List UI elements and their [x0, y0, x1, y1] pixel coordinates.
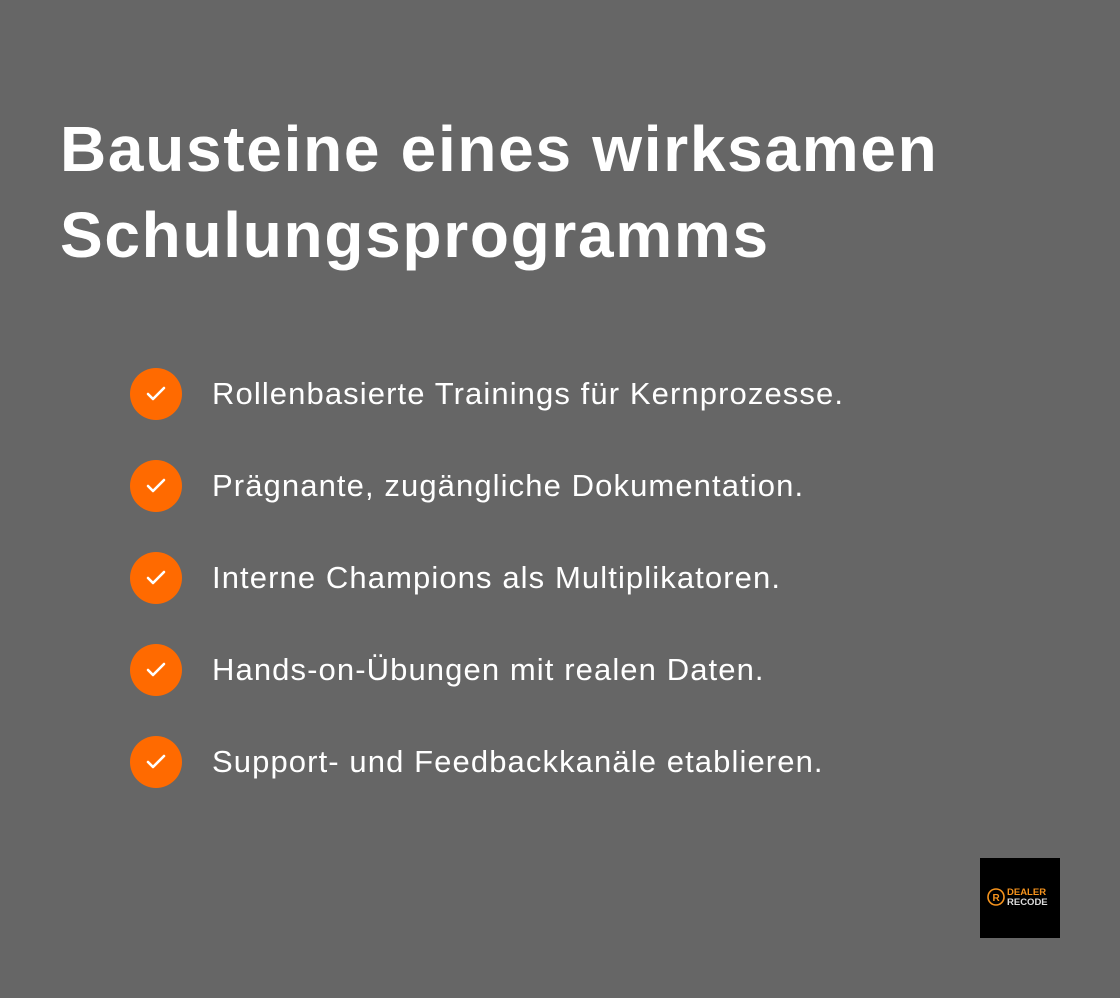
title: Bausteine eines wirksamen — [60, 113, 938, 185]
text: Hands-on-Übungen mit realen Daten. — [212, 652, 765, 687]
item 2 — [130, 460, 804, 512]
logo: R — [992, 893, 1000, 904]
icon: check — [130, 460, 182, 512]
text: Rollenbasierte Trainings für Kernprozesse. — [212, 376, 844, 411]
logo: RECODE — [1007, 897, 1048, 908]
item 5 — [130, 736, 824, 788]
logo — [980, 858, 1060, 938]
icon: check — [130, 552, 182, 604]
title: Schulungsprogramms — [60, 199, 770, 271]
title — [60, 113, 938, 271]
item 4 — [130, 644, 765, 696]
item 3 — [130, 552, 781, 604]
icon: check — [130, 736, 182, 788]
item 1 — [130, 368, 844, 420]
text: Interne Champions als Multiplikatoren. — [212, 560, 781, 595]
text: Support- und Feedbackkanäle etablieren. — [212, 744, 824, 779]
icon: check — [130, 644, 182, 696]
icon: check — [130, 368, 182, 420]
text: Prägnante, zugängliche Dokumentation. — [212, 468, 804, 503]
logo: DEALER — [1007, 887, 1046, 898]
